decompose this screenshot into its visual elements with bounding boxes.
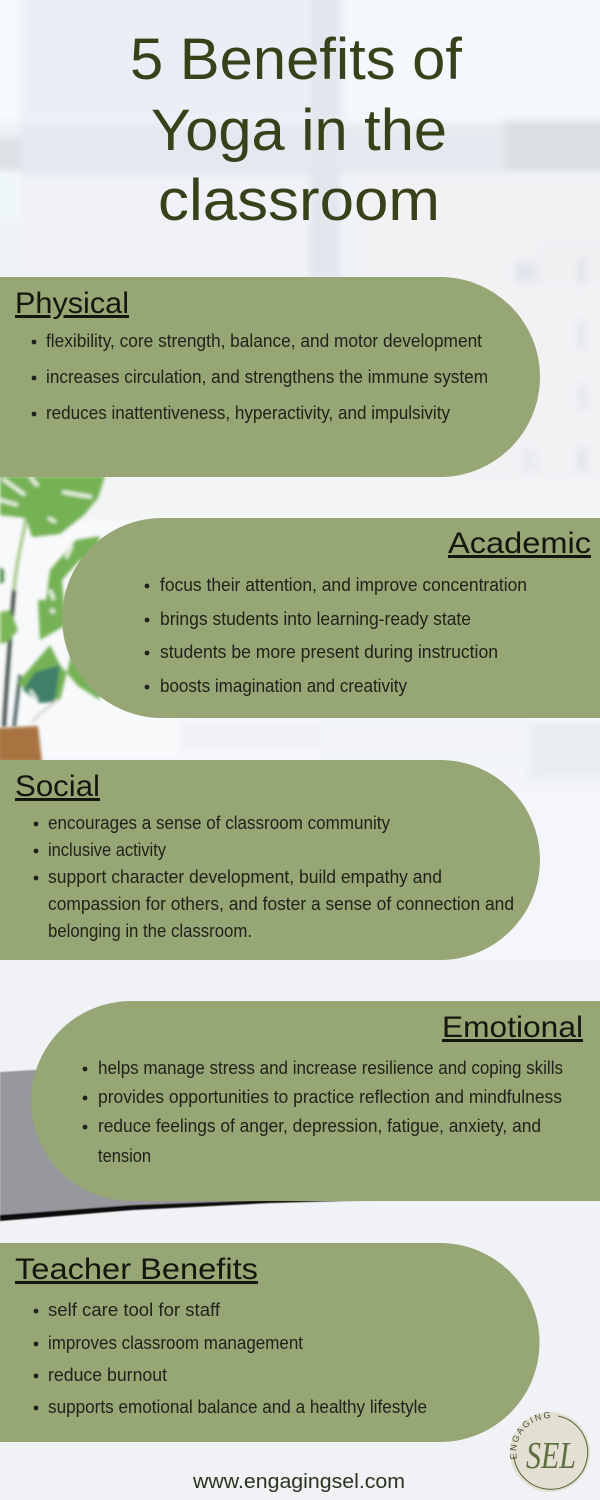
list: emotional benefits: provides opportunities to practice reflection and mindfulness — [98, 1087, 562, 1107]
list: teacher benefits: improves classroom management — [48, 1333, 303, 1353]
list: academic benefits: brings students into learning-ready state — [160, 609, 471, 629]
list: emotional benefits — [83, 1058, 563, 1166]
list: physical benefits: flexibility, core strength, balance, and motor development — [46, 331, 482, 351]
list: social benefits: encourages a sense of classroom community — [48, 813, 390, 833]
list: social benefits: belonging in the classroom. — [48, 921, 252, 941]
list: social benefits — [34, 813, 514, 941]
list: academic benefits: students be more present during instruction — [160, 642, 498, 662]
panel: emotional — [31, 1001, 600, 1201]
list: social benefits: inclusive activity — [48, 840, 166, 860]
list: emotional benefits: helps manage stress and increase resilience and coping skills — [98, 1058, 563, 1078]
panel: academic — [62, 518, 600, 718]
title: 5 Benefits of — [130, 27, 463, 92]
list: emotional benefits: tension — [98, 1146, 151, 1166]
list: teacher benefits: supports emotional balance and a healthy lifestyle — [48, 1397, 427, 1417]
list: social benefits: support character development, build empathy and — [48, 867, 442, 887]
panel: social — [0, 760, 540, 960]
list: physical benefits: increases circulation, and strengthens the immune system — [46, 367, 488, 387]
panel: teacher benefits — [0, 1243, 540, 1442]
title — [130, 27, 463, 233]
list: academic benefits — [145, 575, 527, 696]
list: emotional benefits: reduce feelings of anger, depression, fatigue, anxiety, and — [98, 1116, 541, 1136]
logo: Engaging SEL badge: SEL — [526, 1435, 576, 1477]
title: Yoga in the — [151, 98, 447, 163]
title: classroom — [158, 168, 440, 233]
heading: academic: Academic — [448, 527, 591, 560]
list: academic benefits: focus their attention, and improve concentration — [160, 575, 527, 595]
list: teacher benefits — [34, 1300, 427, 1417]
heading: emotional: Emotional — [442, 1011, 583, 1044]
heading: physical: Physical — [15, 287, 129, 320]
panel: physical — [0, 277, 540, 477]
list: physical benefits: reduces inattentiveness, hyperactivity, and impulsivity — [46, 403, 450, 423]
list: social benefits: compassion for others, and foster a sense of connection and — [48, 894, 514, 914]
list: teacher benefits: reduce burnout — [48, 1365, 167, 1385]
heading: teacher benefits: Teacher Benefits — [15, 1253, 258, 1286]
logo: Engaging SEL badge: ENGAGING — [510, 1412, 550, 1459]
plant in woven pot — [0, 476, 105, 762]
footer website: www.engagingsel.com — [192, 1471, 405, 1493]
list: teacher benefits: self care tool for staff — [48, 1300, 221, 1320]
list: physical benefits — [32, 331, 488, 423]
logo: Engaging SEL badge — [510, 1412, 590, 1492]
yoga mat — [0, 1060, 400, 1221]
heading: social: Social — [15, 770, 100, 803]
list: academic benefits: boosts imagination and creativity — [160, 676, 407, 696]
